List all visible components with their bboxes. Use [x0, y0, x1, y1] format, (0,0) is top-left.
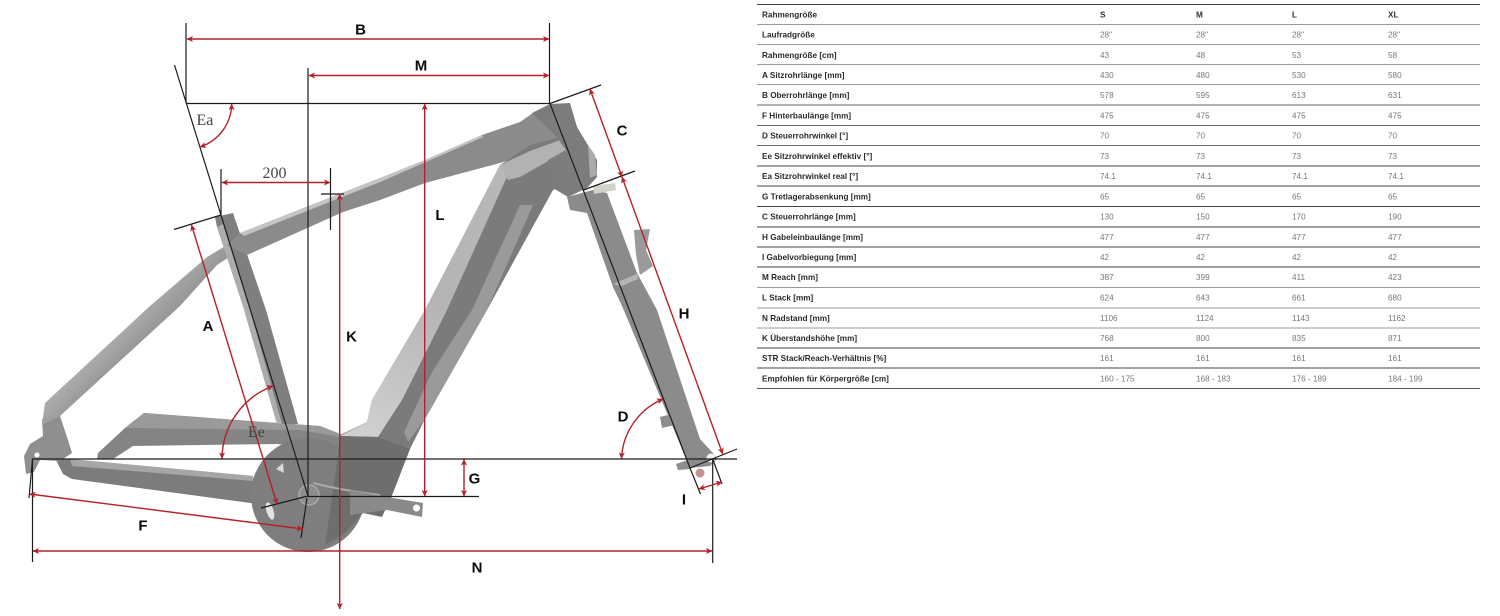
row: M: M Reach [mm] [762, 273, 818, 282]
disc openings [264, 501, 276, 521]
row: Laufradgröße: 28" [1292, 30, 1304, 40]
row: Ee: 73 [1292, 152, 1302, 161]
dimension B [187, 38, 549, 40]
row: I: 42 [1388, 253, 1398, 262]
cable [313, 483, 380, 495]
row: N: N Radstand [mm] [762, 314, 830, 323]
dimension letters: N [472, 560, 482, 576]
row: B [762, 91, 1402, 100]
row: Laufradgröße: 28" [1196, 30, 1208, 40]
row: L: 680 [1388, 294, 1402, 302]
row: K: K Überstandshöhe [mm] [762, 333, 857, 343]
dimension letters: C [617, 122, 628, 140]
row: C: 150 [1196, 212, 1210, 222]
row: A: A Sitzrohrlänge [mm] [762, 71, 845, 80]
fork dropout hole [706, 454, 716, 462]
row: M: 423 [1388, 273, 1402, 282]
row: A: 430 [1100, 71, 1114, 80]
row: N: 1143 [1292, 314, 1310, 323]
dimension letters: 200 [262, 165, 286, 182]
row: H: 477 [1196, 233, 1210, 242]
row: N: 1106 [1100, 314, 1118, 323]
row: G: 65 [1388, 192, 1398, 202]
dimension letters: H [679, 306, 689, 322]
bridge / mudguard [97, 413, 362, 470]
row: N: 1162 [1388, 314, 1406, 323]
row: Rahmengröße cm: 53 [1292, 51, 1302, 60]
row: Rahmengröße: XL [1388, 10, 1398, 20]
row: Ea: 74.1 [1292, 172, 1308, 181]
dimension 200 [222, 182, 330, 184]
row: H: 477 [1388, 233, 1402, 242]
chainstay [56, 459, 258, 504]
row: STR [762, 354, 1402, 363]
motor disc [251, 438, 365, 552]
row: H: 477 [1100, 233, 1114, 242]
row: L: 661 [1292, 294, 1306, 302]
fork [567, 190, 717, 468]
dimension letters: Ee [248, 424, 265, 441]
seat stay [42, 245, 240, 425]
row: Ee: 73 [1100, 152, 1110, 161]
down tube [340, 135, 583, 491]
row: D [762, 132, 1398, 140]
row: STR: 161 [1100, 354, 1114, 363]
row: H [762, 233, 1402, 242]
row: C: 130 [1100, 212, 1114, 222]
dimension H [622, 177, 723, 454]
dimension letters: M [415, 58, 427, 74]
row: Laufradgröße [762, 30, 1400, 40]
row: F [762, 112, 1402, 120]
row: Rahmengröße cm: Rahmengröße [cm] [762, 51, 837, 60]
row: F: 475 [1292, 112, 1306, 120]
row: L: 643 [1196, 294, 1210, 302]
table rules [757, 4, 1480, 388]
row: K: 800 [1196, 334, 1210, 343]
row: Empfohlen: 176 - 189 [1292, 374, 1327, 384]
dimension letters: I [682, 492, 686, 508]
row: N [762, 314, 1406, 323]
row: K: 871 [1388, 334, 1402, 343]
top tube [227, 108, 570, 255]
row: H: 477 [1292, 233, 1306, 242]
motor body [325, 436, 410, 545]
row: K: 768 [1100, 334, 1114, 343]
row: G: G Tretlagerabsenkung [mm] [762, 192, 871, 202]
dimension F [30, 494, 303, 529]
row: STR: 161 [1388, 354, 1402, 363]
down tube light band [340, 165, 510, 437]
dimension K [339, 194, 341, 609]
row: M: 387 [1100, 273, 1114, 282]
row: C: 190 [1388, 212, 1402, 222]
row: Ee: 73 [1196, 152, 1206, 161]
crank arm [350, 490, 423, 517]
row: Ea: 74.1 [1388, 172, 1404, 181]
row: D: D Steuerrohrwinkel [°] [762, 132, 848, 140]
red dimension arrows [30, 39, 723, 609]
row: A: 480 [1196, 71, 1210, 80]
row: Empfohlen: 160 - 175 [1100, 374, 1135, 384]
dimension I [699, 482, 722, 489]
row: Rahmengröße: M [1196, 10, 1203, 20]
dimension letters: F [138, 518, 148, 534]
row: B: 595 [1196, 91, 1210, 100]
dimension letters: G [469, 470, 480, 488]
row: A [762, 71, 1402, 80]
row: D: 70 [1292, 132, 1302, 140]
row: Empfohlen: Empfohlen für Körpergröße [cm] [762, 374, 889, 384]
row: D: 70 [1388, 132, 1398, 140]
reflector dot [696, 468, 704, 478]
head sweep [500, 140, 568, 180]
dimension N [33, 550, 712, 552]
row: A: 530 [1292, 71, 1306, 80]
row: I: 42 [1100, 253, 1110, 262]
row: D: 70 [1196, 132, 1206, 140]
angle Ea [200, 104, 232, 147]
row: I: 42 [1292, 253, 1302, 262]
angle Ee [222, 386, 273, 458]
row: L [762, 294, 1402, 302]
dimension letters: B [355, 22, 366, 38]
row: D: 70 [1100, 132, 1110, 140]
row: Rahmengröße: S [1100, 10, 1106, 20]
row: M: 399 [1196, 273, 1210, 282]
row: I: 42 [1196, 253, 1206, 262]
row: Ea: 74.1 [1100, 172, 1116, 181]
row: C: 170 [1292, 212, 1306, 222]
row: M: 411 [1292, 273, 1305, 282]
row: Laufradgröße: Laufradgröße [762, 30, 815, 40]
row: Empfohlen: 168 - 183 [1196, 374, 1231, 384]
hub ring [299, 485, 319, 505]
row: A: 580 [1388, 71, 1402, 80]
row: G: 65 [1100, 192, 1110, 202]
row: Ea: 74.1 [1196, 172, 1212, 181]
row: Rahmengröße: L [1292, 10, 1297, 20]
row: Ea: Ea Sitzrohrwinkel real [°] [762, 172, 858, 181]
dimension C [590, 89, 622, 177]
row: G: 65 [1196, 192, 1206, 202]
dimension G [463, 460, 465, 496]
row: Ee: 73 [1388, 152, 1398, 161]
row: Empfohlen: 184 - 199 [1388, 374, 1423, 384]
row: F: 475 [1196, 112, 1210, 120]
row: M [762, 273, 1402, 282]
down tube stripe [404, 205, 533, 442]
dimension letters: D [618, 408, 629, 426]
row: Rahmengröße cm: 43 [1100, 51, 1110, 60]
row: STR: 161 [1196, 354, 1210, 363]
dimension M [309, 74, 549, 76]
angle D [622, 399, 663, 458]
dimension A [192, 225, 277, 504]
row: B: 578 [1100, 91, 1114, 100]
row: F: 475 [1388, 112, 1402, 120]
row: Rahmengröße cm: 48 [1196, 51, 1206, 60]
dimension letters [138, 22, 689, 576]
row: K: 835 [1292, 334, 1306, 343]
row: STR: STR Stack/Reach-Verhältnis [%] [762, 354, 886, 363]
row: L: L Stack [mm] [762, 294, 814, 302]
row: F: F Hinterbaulänge [mm] [762, 112, 851, 120]
row: B: 613 [1292, 91, 1306, 100]
rear dropout [24, 416, 72, 474]
row: B: 631 [1388, 91, 1402, 100]
row: F: 475 [1100, 112, 1114, 120]
row: Empfohlen [762, 374, 1423, 384]
row: Rahmengröße cm: 58 [1388, 51, 1398, 60]
row: C [762, 212, 1402, 222]
row: N: 1124 [1196, 314, 1214, 323]
row: Laufradgröße: 28" [1100, 30, 1112, 40]
row: L: 624 [1100, 294, 1114, 302]
row: STR: 161 [1292, 354, 1306, 363]
dimension L [424, 104, 426, 496]
head tube [532, 103, 597, 197]
row: Rahmengröße: Rahmengröße [762, 10, 817, 20]
row: Rahmengröße cm [762, 51, 1398, 60]
row: I: I Gabelvorbiegung [mm] [762, 253, 856, 262]
seat tube [215, 213, 298, 424]
dimension letters: A [203, 318, 214, 335]
row: K [762, 333, 1402, 343]
row: Laufradgröße: 28" [1388, 30, 1400, 40]
dimension letters: K [346, 328, 357, 346]
dimension letters: L [435, 207, 445, 224]
dimension letters: Ea [196, 112, 213, 129]
row: B: B Oberrohrlänge [mm] [762, 91, 850, 100]
row: Ee: Ee Sitzrohrwinkel effektiv [°] [762, 152, 872, 161]
row: Rahmengröße [762, 10, 1398, 20]
row: G: 65 [1292, 192, 1302, 202]
row: Ee [762, 152, 1398, 161]
row: G [762, 192, 1398, 202]
black reference lines [29, 23, 737, 563]
row: I [762, 253, 1398, 262]
geometry table [757, 4, 1480, 388]
row: H: H Gabeleinbaulänge [mm] [762, 233, 863, 242]
row: C: C Steuerrohrlänge [mm] [762, 212, 856, 222]
row: Ea [762, 172, 1404, 181]
bike frame [24, 103, 717, 552]
